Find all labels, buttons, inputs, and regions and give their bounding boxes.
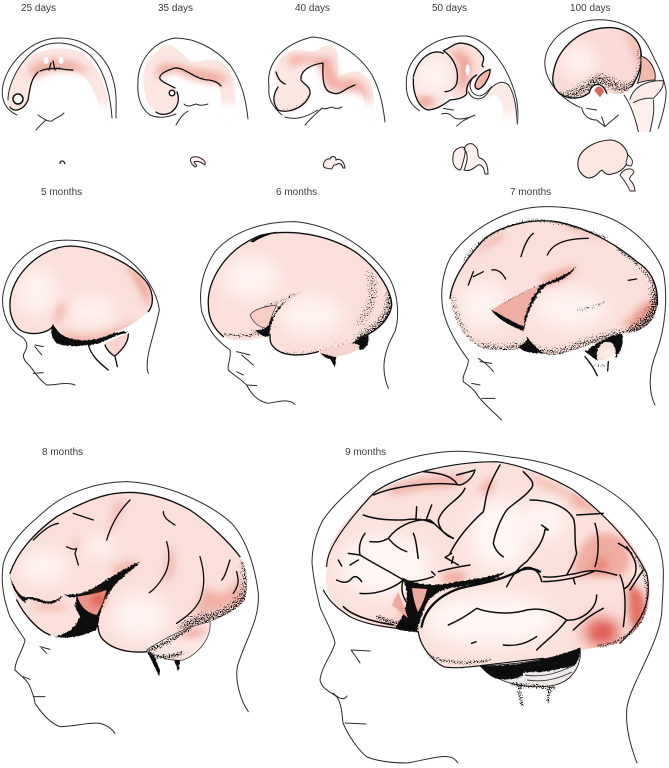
face lines 50 days (442, 108, 475, 126)
panel: 40 days embryo (269, 3, 385, 128)
highlight temporal 8 months (112, 593, 168, 640)
pink notch 100 days (594, 87, 604, 97)
stipple rear edge 8 months (183, 562, 249, 627)
cerebellum 6 months (320, 335, 369, 367)
head outline 9 months (312, 451, 663, 763)
insula 8 months (77, 590, 107, 615)
midbrain red glow 50 days (450, 51, 472, 92)
dark base 5 months (51, 325, 128, 347)
stipple frontal base 9 months (378, 617, 418, 628)
dark sylvian and base 8 months (53, 562, 140, 638)
stipple upper edge 7 months (463, 220, 650, 280)
brain outline 100 days (553, 28, 641, 98)
insula lower line 7 months (491, 310, 524, 331)
red base 5 months (55, 302, 133, 347)
small brain 50 days (453, 144, 488, 174)
stipple rear edge 9 months (428, 555, 647, 663)
panel: 50 days embryo (406, 36, 519, 128)
head outline 5 months (3, 240, 159, 385)
highlight temporal 9 months (425, 594, 555, 646)
brain outline 7 months (450, 221, 657, 305)
brainstem stipple 9 months (512, 684, 555, 706)
upper dark edge 6 months (250, 232, 278, 242)
brainstem lines 7 months (585, 357, 608, 376)
brain 5 months (10, 246, 152, 342)
head outline 50 days (406, 36, 518, 124)
lower lobe divide 7 months (518, 337, 543, 353)
head outline 40 days (269, 37, 385, 125)
red top band 7 months (476, 224, 604, 254)
white slit 50 days (466, 64, 470, 76)
red rear 100 days (623, 30, 640, 70)
tube edges 40 days (274, 63, 355, 111)
brain shading 100 days (557, 30, 644, 97)
highlight frontal 5 months (16, 268, 57, 315)
small brain 25 days (60, 161, 65, 164)
brain tube 40 days (274, 45, 376, 122)
red lower frontal 8 months (30, 603, 70, 610)
cerebellum white 7 months (599, 349, 614, 358)
fissure stipple 6 months (252, 293, 295, 334)
tube shading 35 days (155, 63, 228, 83)
highlight frontal 7 months (460, 282, 507, 328)
sulci temporal 9 months (448, 575, 625, 650)
brain shading 7 months (450, 223, 659, 355)
red rear 7 months (620, 300, 657, 327)
label: 35 days: 35 days (158, 3, 193, 14)
stipple rear 6 months (362, 293, 394, 340)
red glows top 9 months (385, 472, 600, 515)
cerebellum 5 months (105, 334, 128, 355)
brain tube 25 days (8, 49, 111, 122)
stipple lower edge 100 days (557, 50, 644, 97)
cerebellum dark shading 9 months (480, 648, 580, 679)
otic vesicles 25 days (44, 57, 64, 64)
head outline 100 days (545, 20, 666, 128)
sylvian fissure 7 months (523, 266, 577, 333)
label: 6 months: 6 months (276, 187, 317, 198)
stipple detail 5 months (20, 297, 153, 329)
highlight frontal 6 months (223, 257, 280, 300)
cerebellum dark 6 months (320, 335, 369, 368)
label: 50 days: 50 days (432, 3, 467, 14)
brain shading 9 months (340, 472, 646, 646)
red occipital 9 months (628, 585, 646, 631)
panel: 100 days fetus (545, 20, 666, 132)
brain shading 5 months (16, 263, 150, 347)
stipple insula upper 7 months (498, 285, 538, 305)
brain 6 months (208, 232, 392, 355)
pons 100 days (630, 81, 663, 101)
fade at tube end 25 days (92, 104, 118, 128)
neck lines 50 days (468, 80, 517, 124)
stipple inner edge 35 days (178, 68, 222, 84)
brainstem lines 8 months (147, 651, 180, 677)
mid and hindbrain 50 days (443, 43, 488, 98)
red temporal pole 9 months (585, 619, 619, 645)
highlight frontal 9 months (340, 535, 430, 595)
small brain 100 days (578, 140, 628, 178)
red sulcus core parietal 9 months (590, 556, 608, 572)
face lines 100 days (582, 107, 618, 127)
brain edges 50 days (413, 43, 484, 110)
label: 100 days: 100 days (570, 3, 611, 14)
label: 8 months: 8 months (42, 447, 83, 458)
forebrain red base (415, 97, 435, 106)
sulci frontal 9 months (337, 505, 453, 625)
panel: 7 months (442, 207, 666, 420)
tube inner edge 25 days (10, 61, 73, 110)
dark region under sylvian 9 months (395, 572, 505, 632)
highlight frontal 8 months (18, 550, 68, 583)
label: 9 months: 9 months (345, 447, 386, 458)
brain 8 months (10, 492, 247, 652)
pons lines 100 days (630, 81, 663, 103)
face lines 25 days (36, 113, 64, 130)
small cerebellum and cord 100 days (620, 155, 635, 191)
sylvian temporal upper edge 9 months (422, 569, 540, 627)
sulci 7 months (468, 233, 637, 285)
face lines 40 days (285, 107, 342, 118)
brainstem lines 5 months (88, 334, 128, 370)
panel: 8 months (2, 482, 258, 733)
lobule 5 months (53, 327, 65, 342)
cerebellum 8 months (147, 622, 210, 660)
panel: 5 months (3, 240, 159, 385)
cerebellum 100 days (637, 56, 655, 83)
insula 6 months (250, 305, 277, 328)
outer contour 9 months (323, 462, 648, 668)
forebrain highlight (420, 62, 447, 88)
panel: 35 days embryo (138, 3, 248, 128)
highlight temporal 7 months (533, 288, 607, 328)
highlight 100 days (560, 45, 597, 78)
label: 7 months: 7 months (510, 187, 551, 198)
red glow sylvian 7 months (540, 265, 577, 285)
label: 5 months: 5 months (41, 187, 82, 198)
brain shading 6 months (223, 257, 394, 356)
highlight central 9 months (470, 500, 530, 570)
brain outline and sulci 9 months (323, 462, 648, 668)
brain outline 6 months (208, 232, 392, 355)
stipple under temporal 8 months (150, 628, 190, 657)
label: 25 days: 25 days (21, 3, 56, 14)
forebrain 50 days (413, 52, 457, 110)
red glow frontal base 9 months (440, 572, 466, 583)
brain outline 5 months (10, 246, 152, 334)
stipple inner edge 25 days (42, 68, 75, 72)
stipple left edge 7 months (450, 295, 477, 347)
dark shadow under brain 7 months (585, 333, 623, 361)
tube shading 40 days (289, 55, 368, 100)
highlight upper 8 months (83, 537, 117, 557)
sulci parietal 9 months (507, 500, 643, 590)
cerebellar folia 9 months (525, 665, 575, 681)
highlight temporal 5 months (68, 297, 115, 327)
brain outline 8 months (10, 492, 240, 652)
eye 35 days (169, 90, 175, 96)
stem stipple 7 months (588, 362, 608, 366)
red glows parietal 9 months (572, 533, 630, 578)
head outline 25 days (2, 38, 116, 118)
sulci 8 months (33, 500, 238, 623)
fade at tube end 50 days (498, 115, 519, 128)
insula gyri 9 months (392, 588, 427, 618)
head outline 7 months (442, 207, 666, 420)
dark frontal sulcus 8 months (10, 577, 63, 604)
cerebellum red 8 months (180, 627, 207, 638)
tube edges 35 days (156, 68, 221, 114)
fade at tube end 35 days (216, 104, 242, 128)
highlight parietal 9 months (525, 500, 565, 540)
brain 100 days (552, 28, 641, 98)
spinal cord 100 days (630, 102, 654, 132)
stipple rear edge 7 months (630, 282, 659, 333)
cerebellum 9 months (480, 648, 580, 687)
stipple temporal patch 7 months (577, 302, 605, 310)
sylvian fissure 6 months (255, 291, 303, 337)
brain 9 months (326, 462, 650, 667)
small-scale brains row (60, 140, 635, 191)
sulci upper 9 months (373, 465, 533, 575)
spinal tube 50 days (472, 84, 516, 124)
insula red core 8 months (92, 593, 104, 605)
brain shading 8 months (18, 502, 249, 640)
fold 50 days (475, 69, 490, 89)
panel: 25 days embryo (2, 3, 118, 130)
stipple lower edges 6 months (223, 332, 267, 336)
panel: 6 months (200, 222, 398, 404)
highlight temporal 6 months (280, 295, 343, 335)
brain 7 months (450, 221, 657, 355)
small brain 35 days (190, 157, 205, 167)
red sulcus glows 8 months (72, 502, 243, 617)
insula 7 months (492, 285, 540, 328)
brain tube 35 days (143, 45, 237, 122)
spinal cord lines 100 days (624, 95, 654, 132)
tube shading 25 days (28, 59, 90, 80)
red base frontal 9 months (345, 600, 412, 626)
fade at tube end 40 days (360, 104, 382, 128)
small brain 40 days (323, 156, 345, 169)
stipple lower edge 7 months (473, 333, 627, 355)
stipple lower temporal 6 months (283, 339, 356, 354)
panel: 9 months (312, 447, 663, 763)
stipple edges 40 days (276, 76, 358, 109)
forebrain shading 50 days (416, 62, 447, 110)
stipple sparse rear 6 months (358, 272, 373, 325)
head outline 35 days (138, 38, 248, 125)
optic vesicle 25 days (13, 94, 23, 104)
cerebellum 7 months (594, 338, 617, 360)
head outline 6 months (200, 222, 398, 404)
face lines 35 days (150, 104, 208, 117)
label: 40 days: 40 days (295, 3, 330, 14)
red occipital 5 months (123, 263, 150, 307)
head outline 8 months (2, 482, 258, 733)
panels drawn at 3x: 50 and 100 days (406, 20, 666, 132)
